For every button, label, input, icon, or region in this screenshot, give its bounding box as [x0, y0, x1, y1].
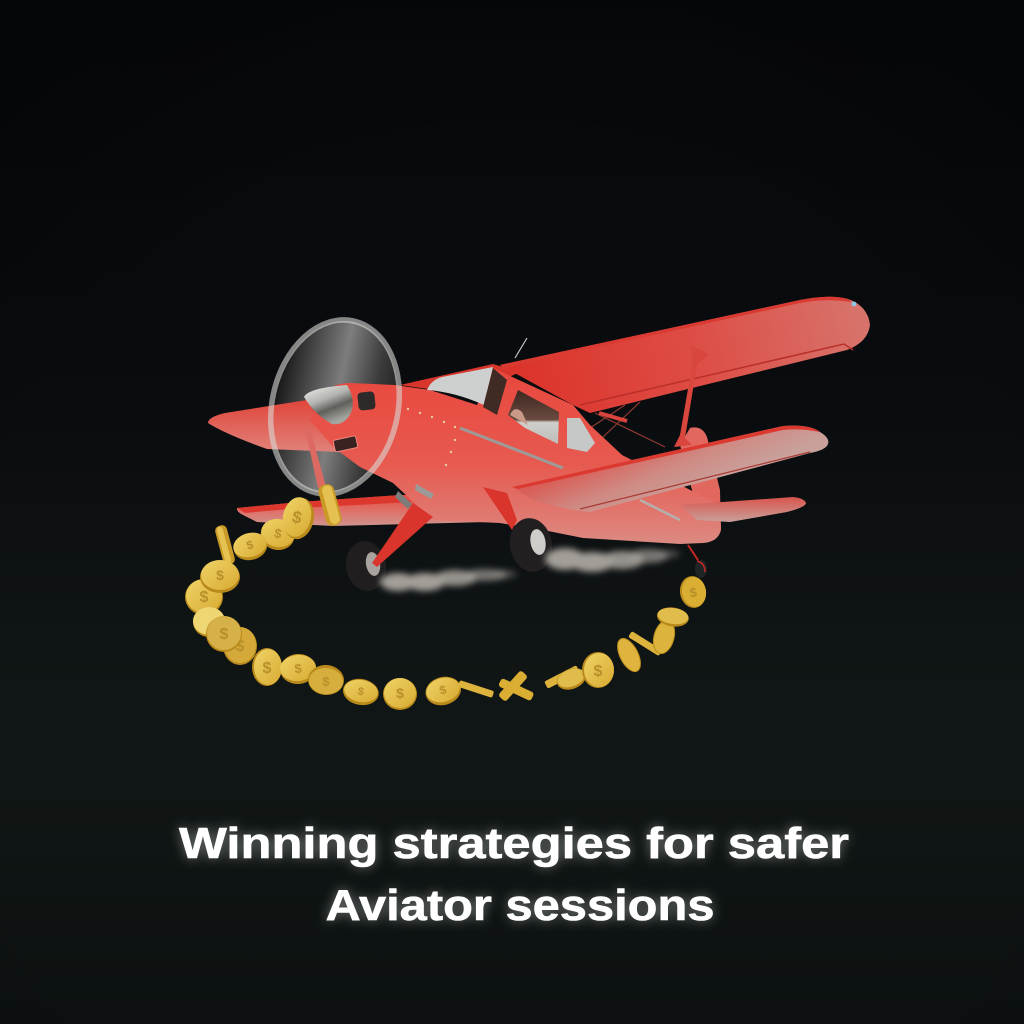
lower left wing: [237, 495, 487, 526]
illustration: red biplane: [208, 297, 870, 594]
coin: [185, 579, 223, 615]
coin: $: [594, 663, 603, 680]
coin: $: [357, 686, 365, 698]
coin: [383, 678, 417, 710]
coin: $: [200, 589, 209, 606]
main landing gear: [483, 487, 556, 575]
fuselage: [310, 368, 721, 544]
nose vents: [357, 391, 376, 411]
nose landing gear: [342, 503, 433, 594]
coin: [200, 560, 240, 593]
title glow: Winning strategies for safer: [179, 819, 849, 868]
tail plane: [680, 497, 806, 522]
coin: [193, 607, 225, 637]
coin: [613, 635, 645, 675]
coin: [582, 652, 614, 688]
coin: $: [273, 525, 284, 542]
coin: [677, 574, 709, 610]
coin: [656, 605, 690, 629]
crossed coins: [498, 670, 534, 702]
coin: [279, 652, 317, 686]
tail fin: [680, 427, 721, 530]
coin: [223, 627, 257, 665]
coin: [279, 495, 318, 542]
coin: [307, 664, 345, 696]
coin on edge: [544, 665, 580, 689]
rivets: [407, 408, 456, 466]
coin: $: [236, 638, 245, 655]
cockpit windows: [427, 367, 595, 452]
exhaust pipes: [415, 484, 434, 499]
coin: [650, 618, 678, 656]
coin on edge: [458, 680, 494, 698]
spinning propeller ring: [255, 308, 415, 506]
upper wing stripe behind the cabin: [400, 364, 520, 395]
lower right wing: [512, 426, 828, 512]
bracing wires: [515, 338, 665, 447]
title text: Aviator sessions: [326, 881, 714, 930]
coin: [206, 616, 242, 652]
coin on edge: [628, 631, 662, 656]
smoke: nose wheel: [380, 569, 517, 591]
fuselage stripe: [460, 428, 563, 468]
coin: $: [216, 567, 224, 583]
title text: Winning strategies for safer: [179, 819, 849, 868]
coin: $: [438, 682, 448, 698]
coin: [258, 516, 297, 553]
upper left wing: [208, 400, 340, 452]
coin: [230, 529, 270, 564]
coin: $: [290, 507, 304, 528]
coin on propeller: [317, 483, 343, 527]
wing strut: [674, 345, 709, 447]
propeller blade: [305, 428, 326, 488]
coin: [252, 648, 282, 686]
title glow: Aviator sessions: [326, 881, 714, 930]
title glow: [179, 819, 849, 930]
coin: $: [688, 584, 699, 601]
coin: $: [220, 626, 229, 643]
coin: $: [245, 537, 255, 553]
coin: [422, 673, 464, 709]
title: [179, 819, 849, 930]
coin: $: [322, 674, 331, 689]
coin on edge: [214, 524, 236, 566]
tail wheel: [688, 545, 707, 578]
title text: [179, 819, 849, 930]
upper right wing: [500, 297, 870, 413]
coin: [554, 664, 589, 693]
coin ring: [185, 483, 709, 710]
coin: [341, 676, 381, 708]
smoke trails: [380, 548, 680, 591]
coin: $: [294, 661, 303, 676]
smoke: main wheel: [545, 548, 680, 572]
propeller disc: dark blur: [256, 309, 414, 505]
coin: $: [263, 660, 272, 677]
coin: $: [396, 685, 404, 701]
chrome spinner: [304, 385, 353, 424]
